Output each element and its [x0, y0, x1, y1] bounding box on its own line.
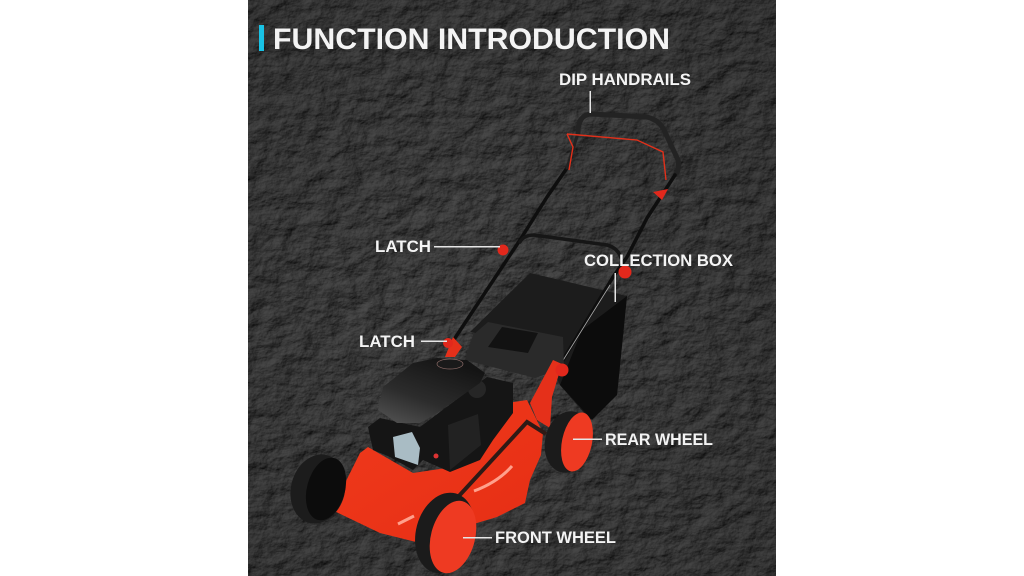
collection box bag — [470, 273, 627, 420]
label: upper latch: LATCH — [375, 237, 431, 256]
panel: stone background — [248, 0, 776, 576]
front right wheel — [406, 486, 484, 576]
engine hood — [378, 358, 485, 423]
label: front wheel: FRONT WHEEL — [495, 528, 616, 547]
label: lower latch: LATCH — [359, 332, 415, 351]
latch knobs — [443, 189, 668, 376]
engine block — [368, 377, 513, 472]
carburetor — [393, 432, 420, 465]
label: dip handrails — [559, 70, 691, 113]
label: lower latch — [359, 332, 447, 351]
label: upper latch — [375, 237, 500, 256]
title: FUNCTION INTRODUCTION — [273, 23, 670, 56]
mower deck — [332, 400, 546, 543]
lawn mower — [283, 114, 679, 576]
label: collection box: COLLECTION BOX — [584, 251, 734, 270]
label: dip handrails: DIP HANDRAILS — [559, 70, 691, 89]
handle frame — [455, 114, 679, 362]
front left wheel — [283, 448, 353, 530]
control cable — [567, 134, 666, 180]
red brackets — [445, 337, 562, 428]
bag cover — [465, 322, 564, 378]
label: rear wheel: REAR WHEEL — [605, 430, 713, 449]
rear wheel — [539, 407, 598, 477]
